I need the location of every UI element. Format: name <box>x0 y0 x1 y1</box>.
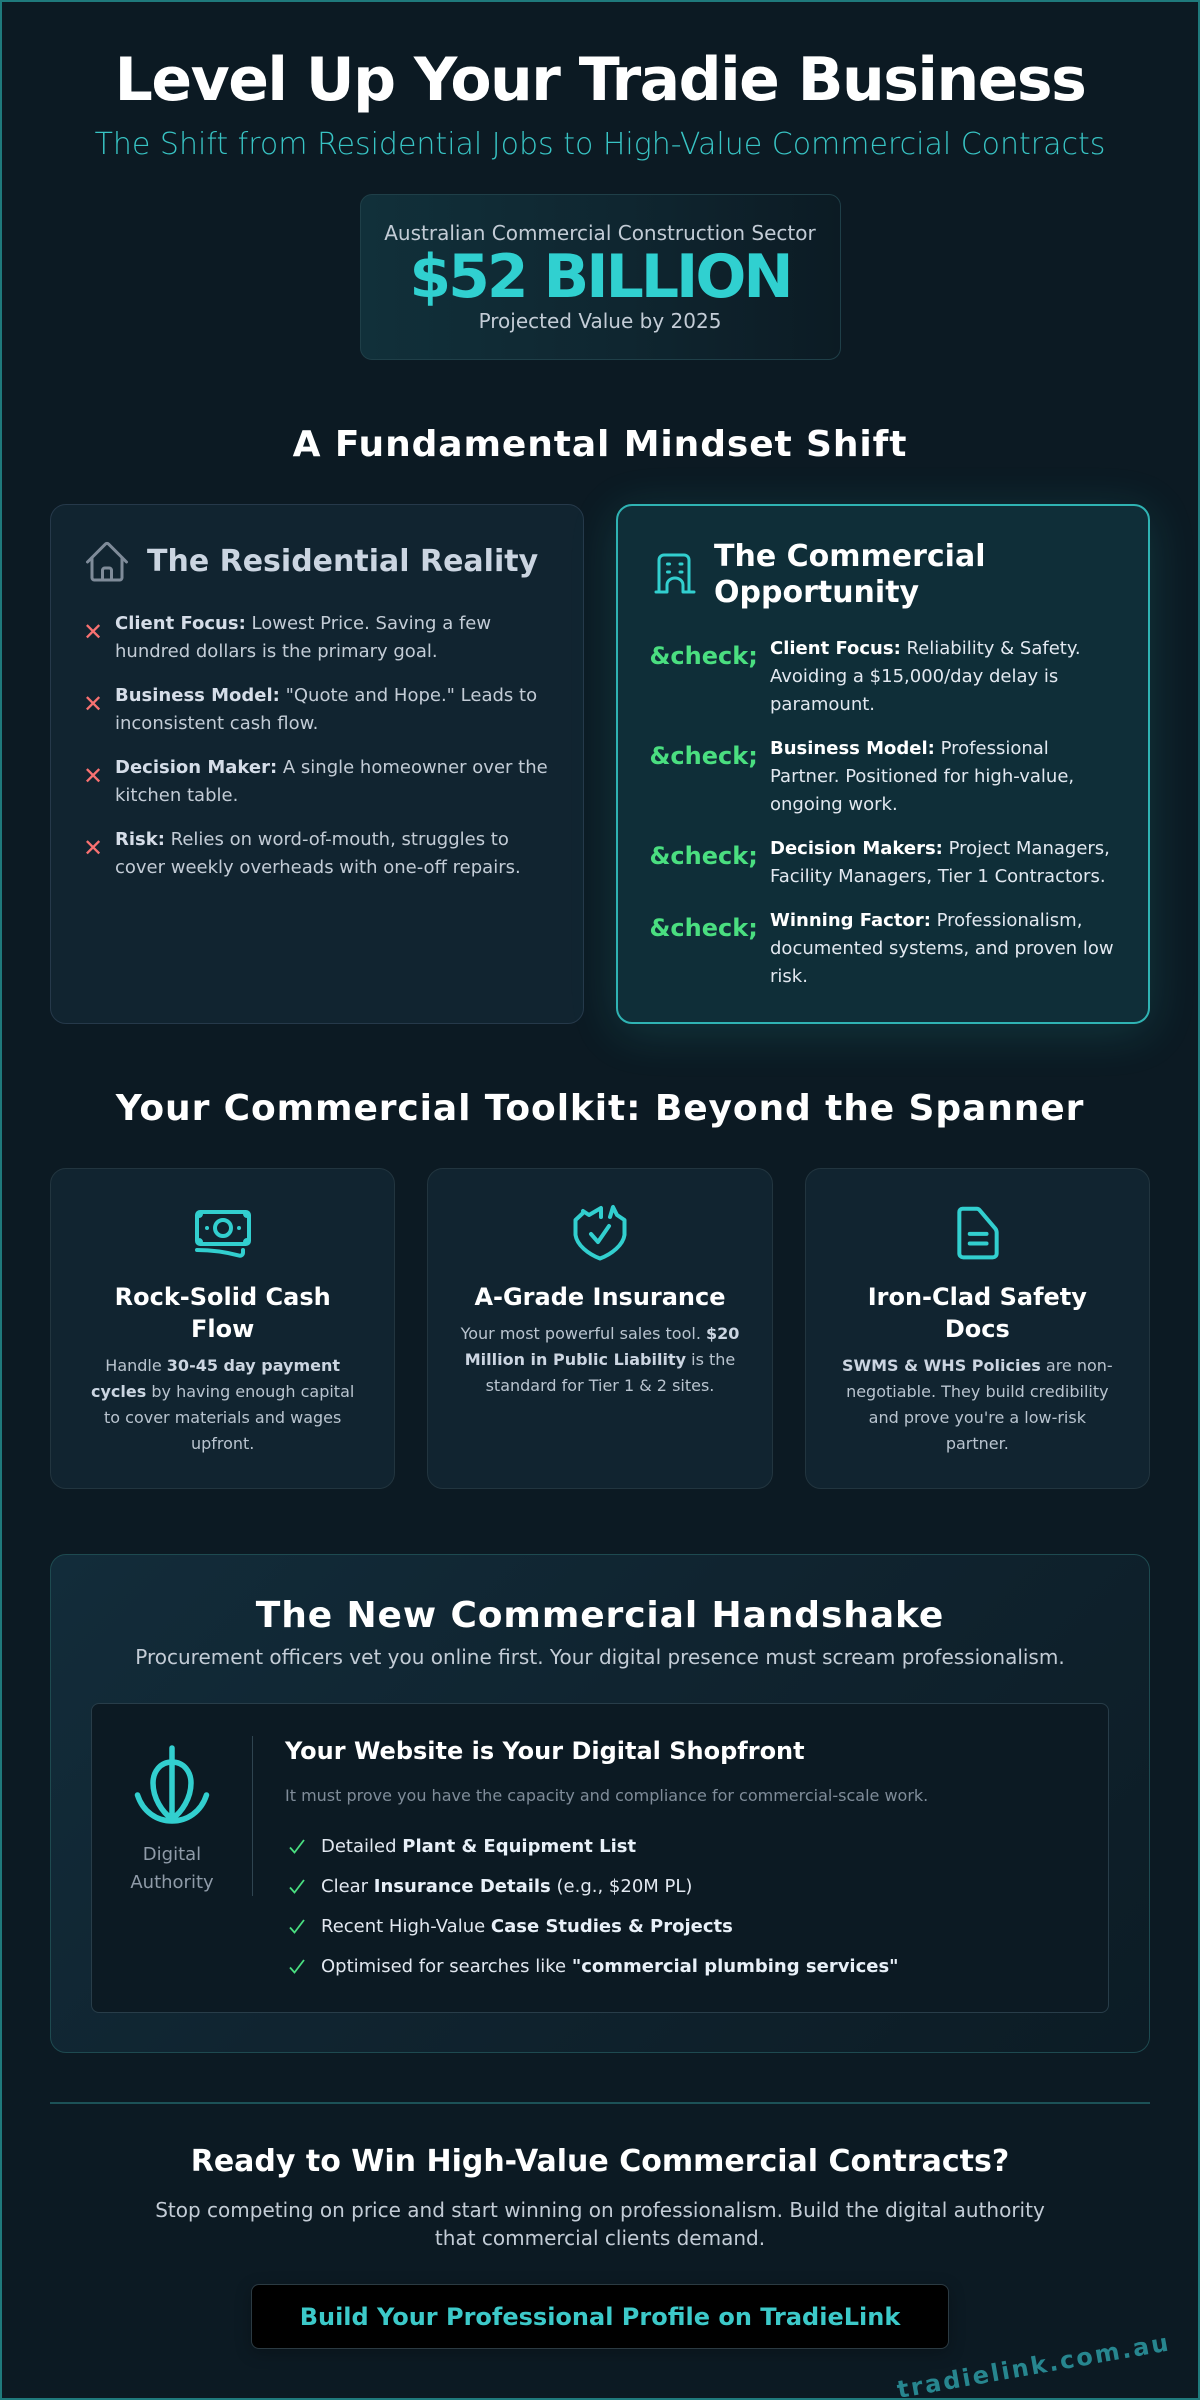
check icon 1 <box>289 1840 305 1854</box>
panel heading: The New Commercial Handshake <box>256 1594 944 1636</box>
card text: Your most powerful sales tool. $20 <box>461 1324 739 1343</box>
card text: upfront. <box>191 1434 254 1453</box>
card title: Rock-Solid Cash <box>115 1283 331 1311</box>
vertical separator <box>252 1736 253 1896</box>
item: client focus: &check; <box>650 642 758 670</box>
item: business model: inconsistent cash flow. <box>115 713 318 734</box>
card title: Flow <box>191 1315 254 1343</box>
item: winning factor: risk. <box>770 966 808 987</box>
card text <box>460 1324 739 1395</box>
button label: Build Your Professional Profile on TradieLink <box>300 2303 900 2331</box>
card text: standard for Tier 1 & 2 sites. <box>486 1376 714 1395</box>
card title: Docs <box>945 1315 1010 1343</box>
item: winning factor: documented systems, and proven low <box>770 938 1114 959</box>
heading: toolkit: Your Commercial Toolkit: Beyond the Spanner <box>116 1088 1084 1129</box>
item: client focus: Client Focus: Reliability & Safety. <box>770 638 1081 659</box>
item: decision maker: ✕ <box>83 762 103 790</box>
panel: commercial opportunity <box>616 504 1150 1024</box>
item: risk: ✕ <box>83 834 103 862</box>
item: business model: Business Model: Professional <box>770 738 1049 759</box>
card text: to cover materials and wages <box>104 1408 341 1427</box>
checklist item 2: Clear Insurance Details (e.g., $20M PL) <box>321 1876 692 1897</box>
icon: document <box>957 1206 999 1260</box>
card: cash flow <box>50 1168 395 1489</box>
item: client focus: Client Focus: Lowest Price. Saving a few <box>115 613 491 634</box>
item: client focus: Avoiding a $15,000/day delay is <box>770 666 1058 687</box>
card text: SWMS & WHS Policies are non- <box>842 1356 1113 1375</box>
check icon 2 <box>289 1880 305 1894</box>
panel: digital shopfront <box>91 1703 1109 2013</box>
card text: and prove you're a low-risk <box>869 1408 1086 1427</box>
call to action text <box>155 2198 1045 2250</box>
icon caption <box>130 1844 214 1893</box>
item: client focus: paramount. <box>770 694 875 715</box>
card text: partner. <box>946 1434 1009 1453</box>
shopfront heading: Your Website is Your Digital Shopfront <box>285 1737 805 1765</box>
item: business model: Business Model: "Quote and Hope." Leads to <box>115 685 537 706</box>
checklist <box>289 1836 899 1977</box>
item: client focus: hundred dollars is the primary goal. <box>115 641 438 662</box>
subtitle: The Shift from Residential Jobs to High-Value Commercial Contracts <box>95 127 1105 162</box>
item: decision makers <box>650 838 1110 887</box>
item: decision makers: Decision Makers: Project Managers, <box>770 838 1110 859</box>
icon caption: Digital <box>143 1844 201 1865</box>
item: business model: ongoing work. <box>770 794 898 815</box>
item: winning factor: Winning Factor: Professionalism, <box>770 910 1082 931</box>
item: business model: Partner. Positioned for high-value, <box>770 766 1074 787</box>
card text: negotiable. They build credibility <box>846 1382 1109 1401</box>
card text <box>91 1356 354 1453</box>
panel intro: Procurement officers vet you online first. Your digital presence must scream professionalism. <box>135 1645 1065 1669</box>
call to action text: Stop competing on price and start winning on professionalism. Build the digital authority <box>155 2198 1045 2222</box>
card text <box>842 1356 1113 1453</box>
item: decision makers: Facility Managers, Tier 1 Contractors. <box>770 866 1106 887</box>
card: insurance <box>427 1168 773 1489</box>
item: decision maker: Decision Maker: A single homeowner over the <box>115 757 548 778</box>
call to action text: that commercial clients demand. <box>435 2226 765 2250</box>
item: winning factor <box>650 910 1114 987</box>
card: safety docs <box>805 1168 1150 1489</box>
panel heading: The Commercial <box>714 539 986 574</box>
stat box: market value <box>360 194 840 360</box>
panel heading <box>714 539 986 610</box>
item: risk <box>83 829 521 878</box>
checklist item 4: Optimised for searches like "commercial plumbing services" <box>321 1956 899 1977</box>
item: client focus <box>83 613 491 662</box>
item: winning factor: &check; <box>650 914 758 942</box>
stat label: Australian Commercial Construction Sector <box>384 221 816 245</box>
item: client focus <box>650 638 1081 715</box>
section divider <box>50 2102 1150 2104</box>
checklist item 3: Recent High-Value Case Studies & Projects <box>321 1916 733 1937</box>
card text: Million in Public Liability is the <box>465 1350 735 1369</box>
card title: Iron-Clad Safety <box>868 1283 1087 1311</box>
item: client focus: ✕ <box>83 618 103 646</box>
panel heading: The Residential Reality <box>147 544 538 579</box>
panel: new commercial handshake <box>50 1554 1150 2053</box>
card text: cycles by having enough capital <box>91 1382 354 1401</box>
checklist item 1: Detailed Plant & Equipment List <box>321 1836 636 1857</box>
icon: office building <box>654 554 696 594</box>
icon: banknote <box>195 1210 251 1258</box>
button <box>251 2284 949 2349</box>
item: risk: cover weekly overheads with one-off repairs. <box>115 857 521 878</box>
call to action heading: Ready to Win High-Value Commercial Contracts? <box>191 2144 1009 2179</box>
stat value: $52 BILLION <box>409 242 791 312</box>
item: business model: ✕ <box>83 690 103 718</box>
panel: residential reality <box>50 504 584 1024</box>
item: business model: &check; <box>650 742 758 770</box>
check icon 3 <box>289 1920 305 1934</box>
icon: digital authority <box>134 1745 210 1824</box>
item: decision makers: &check; <box>650 842 758 870</box>
icon: house <box>86 542 128 582</box>
item: decision maker: kitchen table. <box>115 785 238 806</box>
card title: A-Grade Insurance <box>474 1283 726 1311</box>
card text: Handle 30-45 day payment <box>105 1356 340 1375</box>
icon: shield with check <box>574 1204 626 1260</box>
item: decision maker <box>83 757 548 806</box>
item: business model <box>83 685 537 734</box>
item: business model <box>650 738 1074 815</box>
title: Level Up Your Tradie Business <box>115 45 1085 115</box>
panel heading: Opportunity <box>714 575 919 610</box>
stat note: Projected Value by 2025 <box>479 309 721 333</box>
shopfront intro: It must prove you have the capacity and compliance for commercial-scale work. <box>285 1786 928 1804</box>
heading: mindset shift: A Fundamental Mindset Shift <box>293 424 907 464</box>
card title <box>868 1283 1087 1343</box>
item: risk: Risk: Relies on word-of-mouth, struggles to <box>115 829 509 850</box>
check icon 4 <box>289 1960 305 1974</box>
icon caption: Authority <box>130 1872 214 1893</box>
card title <box>115 1283 331 1343</box>
